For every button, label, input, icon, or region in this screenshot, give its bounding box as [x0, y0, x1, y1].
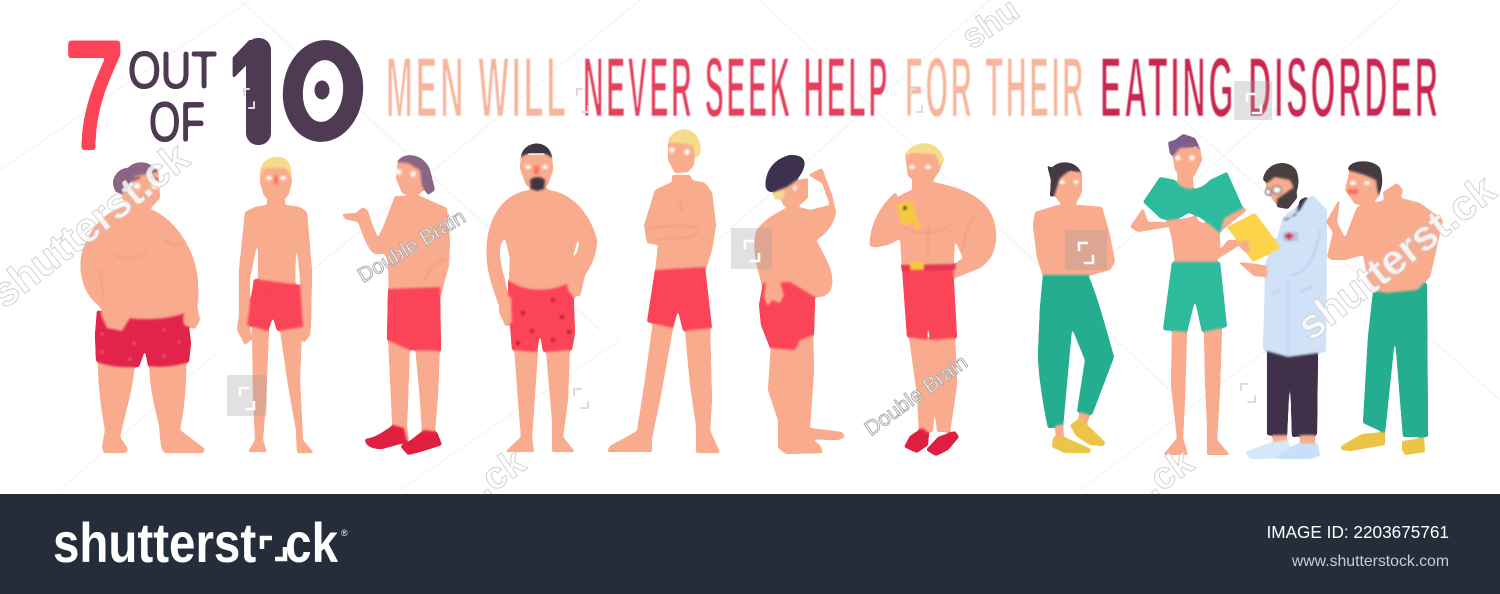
- watermarks: .ck: [1134, 440, 1202, 506]
- title: 7 out of 10: [68, 38, 364, 150]
- figure: bearded stocky man with dotted shorts: [486, 144, 597, 452]
- website: www.shutterstock.com: [1291, 553, 1449, 570]
- figure: obese man in dark red shorts: [81, 162, 205, 453]
- hat: [765, 155, 805, 192]
- watermarks: shutterst.ck: [1288, 165, 1500, 349]
- phone: [896, 200, 918, 226]
- sandals: [904, 428, 929, 453]
- shoes: [1245, 440, 1292, 459]
- shorts: [647, 267, 712, 331]
- title: men will never seek help for their eating disorder: NEVER SEEK HELP: [583, 40, 890, 136]
- figure: man with long hair and red shoes: [342, 155, 450, 455]
- figure: man in green trousers: [1033, 162, 1115, 453]
- hair: [397, 155, 435, 195]
- hair: [905, 143, 944, 168]
- head: [1266, 174, 1296, 207]
- title: men will never seek help for their eating disorder: MEN WILL: [386, 40, 569, 136]
- shorts: [95, 310, 191, 367]
- shutterstock logo: shutterstock: [53, 511, 339, 574]
- words out of: OF: [149, 90, 205, 153]
- t-shirt: [1143, 172, 1243, 233]
- shorts: [1163, 262, 1227, 332]
- hair: [668, 130, 701, 157]
- shorts: [902, 265, 957, 340]
- figure: blond man with crossed arms: [607, 130, 720, 453]
- watermarks: .ck: [466, 440, 534, 506]
- hair and beard: [521, 144, 552, 158]
- watermarks: Double Brain: [354, 205, 470, 288]
- words out of: [128, 42, 217, 153]
- numeral 10: 1: [228, 11, 278, 174]
- shutterstock logo: ®: [341, 528, 348, 538]
- title: men will never seek help for their eating disorder: FOR THEIR: [905, 40, 1086, 136]
- words out of: OUT: [128, 42, 217, 100]
- watermarks: Double Brain: [860, 351, 972, 441]
- hair: [260, 157, 291, 178]
- footer bar: [0, 494, 1500, 594]
- lab coat: [1263, 195, 1327, 357]
- figure: skinny blond man in red shorts: [237, 157, 314, 453]
- numeral 10: [232, 38, 364, 145]
- hands: [101, 303, 130, 331]
- figure: muscular man with phone: [870, 143, 996, 456]
- shorts: [387, 287, 441, 351]
- shorts: [759, 282, 815, 350]
- hair: [113, 162, 158, 194]
- shorts: [247, 279, 303, 331]
- badge: [1283, 232, 1298, 241]
- red shoes: [365, 425, 407, 449]
- hair: [1348, 161, 1382, 195]
- figure: man scratching his back in green trousers: [1326, 161, 1443, 455]
- beard: [1277, 186, 1297, 209]
- figure: overweight man with hat seen from the side: [754, 155, 845, 454]
- image id: IMAGE ID: 2203675761: [1266, 522, 1449, 542]
- numeral 7: 7: [65, 13, 123, 179]
- figure: emaciated man in green t-shirt and shorts: [1130, 134, 1247, 455]
- shorts: [508, 280, 575, 352]
- figure: doctor with clipboard: [1227, 163, 1327, 459]
- yellow shoes: [1341, 432, 1385, 451]
- hair: [1168, 134, 1201, 156]
- hand at neck: [1383, 183, 1403, 200]
- belt buckle: [910, 262, 924, 270]
- trousers: [1038, 275, 1114, 428]
- hair: [1047, 162, 1081, 197]
- clipboard: [1227, 213, 1281, 262]
- yellow shoes: [1052, 437, 1091, 453]
